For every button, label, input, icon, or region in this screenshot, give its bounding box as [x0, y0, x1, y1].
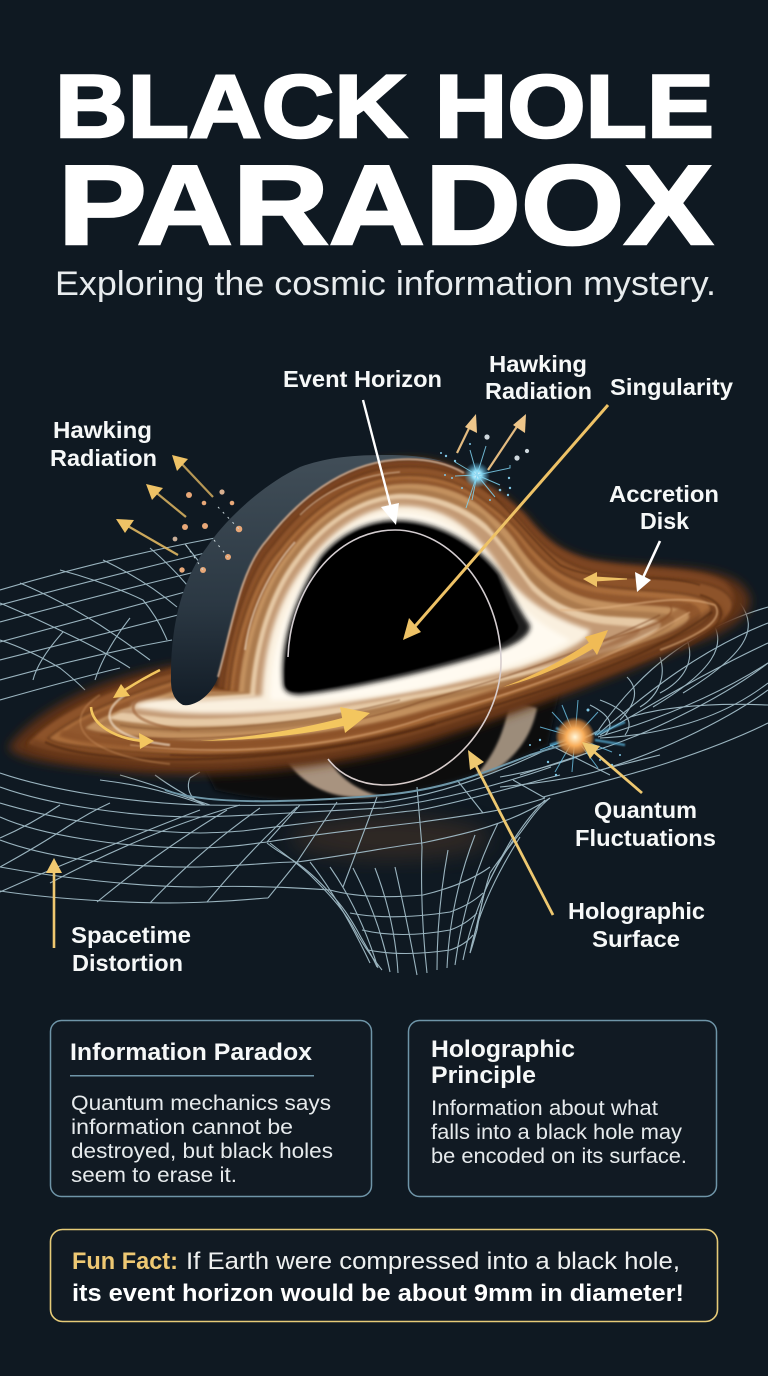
label: accretion disk: Disk [640, 508, 689, 534]
arrow: disk flow right [503, 630, 608, 687]
title: PARADOX [58, 142, 713, 268]
text: information paradox body: seem to erase it. [71, 1163, 237, 1187]
label: quantum fluctuations [575, 797, 716, 851]
text: holographic principle body: falls into a black hole may [431, 1120, 682, 1144]
text: fun fact line 2: its event horizon would be about 9mm in diameter! [72, 1280, 684, 1307]
arrow: singularity [403, 405, 608, 640]
text: information paradox body [71, 1091, 333, 1187]
heading: information paradox: Information Paradox [70, 1039, 313, 1066]
sphere rim line [218, 459, 464, 677]
arrow: disk flow upper right [583, 572, 627, 587]
event horizon black core [282, 520, 530, 695]
arrow: disk flow left [91, 670, 160, 749]
lower disk shading [30, 606, 722, 763]
spacetime grid: right sheet [500, 603, 768, 797]
spacetime grid: funnel [267, 798, 550, 975]
text: fun fact line 1: Fun Fact: [72, 1248, 178, 1275]
arrow: spacetime distortion [46, 858, 62, 948]
text: holographic principle body [431, 1096, 687, 1168]
label: holographic surface [568, 898, 705, 952]
hawking radiation particles: left [173, 489, 242, 573]
title [55, 56, 714, 268]
text: information paradox body: Quantum mechanics says [71, 1091, 331, 1115]
label: spacetime distortion: Distortion [72, 950, 183, 976]
label: spacetime distortion: Spacetime [71, 922, 191, 948]
label: hawking radiation left [50, 417, 157, 471]
text: holographic principle body: Information about what [431, 1096, 658, 1120]
text: information paradox body: information cannot be [71, 1115, 293, 1139]
text: holographic principle body: be encoded on its surface. [431, 1144, 687, 1168]
diagram: black hole illustration [0, 400, 768, 975]
spacetime grid: upper left sheet [0, 538, 215, 700]
lensed underside of disk [200, 690, 560, 860]
label: hawking radiation right: Radiation [485, 378, 592, 404]
label: hawking radiation right: Hawking [489, 351, 587, 377]
arrow: disk flow front [200, 707, 370, 741]
spacetime grid: lower sheet [0, 748, 560, 903]
label: spacetime distortion [71, 922, 191, 976]
text: fun fact line 1: If Earth were compressed into a black hole, [186, 1248, 680, 1275]
arrows: hawking radiation left [116, 455, 213, 555]
spacetime grid: near rim line [165, 730, 600, 801]
heading: holographic principle: Holographic [431, 1036, 575, 1063]
panel: information paradox [50, 1020, 372, 1196]
arrow: holographic surface [468, 750, 553, 915]
burst: quantum fluctuations [529, 700, 625, 776]
arrow: quantum fluctuations [582, 742, 642, 793]
heading: holographic principle: Principle [431, 1062, 536, 1089]
dark sphere shadow [171, 455, 445, 705]
title: BLACK HOLE [55, 56, 714, 156]
label: event horizon: Event Horizon [283, 366, 442, 392]
label: singularity: Singularity [610, 374, 733, 400]
arrow: event horizon [363, 400, 399, 525]
arrows: hawking radiation right [457, 414, 526, 470]
label: quantum fluctuations: Fluctuations [575, 825, 716, 851]
label: hawking radiation left: Radiation [50, 445, 157, 471]
panel: holographic principle [408, 1020, 716, 1196]
label: holographic surface: Holographic [568, 898, 705, 924]
label: accretion disk: Accretion [609, 481, 719, 507]
arrow: accretion disk [635, 541, 660, 592]
label: accretion disk [609, 481, 719, 534]
subtitle: Exploring the cosmic information mystery. [55, 265, 716, 303]
callout: fun fact [50, 1230, 718, 1322]
label: hawking radiation left: Hawking [53, 417, 152, 443]
label: quantum fluctuations: Quantum [594, 797, 697, 823]
heading: holographic principle [431, 1036, 575, 1089]
disk streaks [45, 472, 721, 764]
burst: hawking radiation right [440, 434, 529, 508]
accretion disk and photon arch rings [8, 459, 750, 774]
holographic surface ring [288, 530, 501, 785]
label: holographic surface: Surface [592, 926, 680, 952]
text: information paradox body: destroyed, but black holes [71, 1139, 333, 1163]
label: hawking radiation right [485, 351, 592, 404]
